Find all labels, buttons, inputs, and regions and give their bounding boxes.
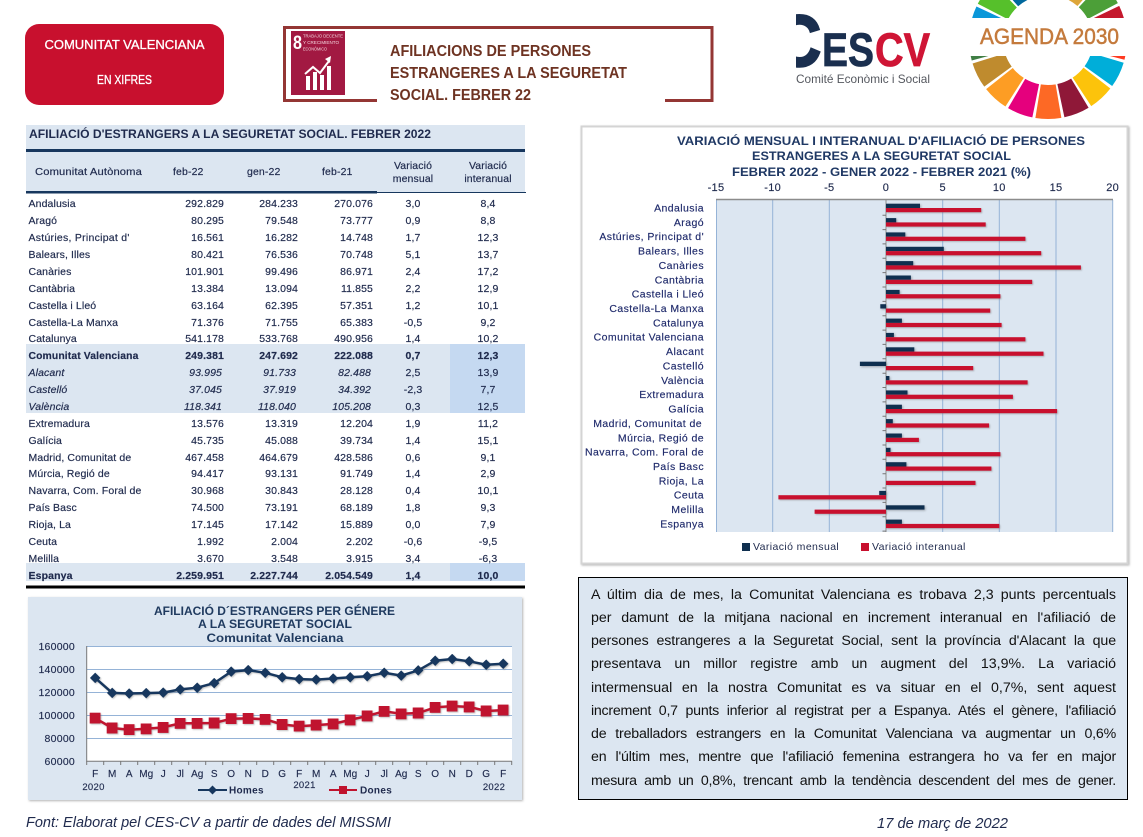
table column: variació mensual xyxy=(404,198,422,582)
table header: Variació xyxy=(394,160,432,172)
table column: feb-22: 467.458 xyxy=(185,452,224,464)
table column: variació mensual: 5,1 xyxy=(406,249,421,261)
bar chart legend xyxy=(742,541,966,553)
table column: gen-22: 99.496 xyxy=(265,266,298,278)
table column: gen-22: 3.548 xyxy=(271,553,298,565)
table column: regions: Castella-La Manxa xyxy=(28,317,118,329)
table column: feb-21: 270.076 xyxy=(334,198,373,210)
table column: variació interanual: 11,2 xyxy=(478,418,498,430)
table column: regions: Castella i Lleó xyxy=(28,300,96,312)
line chart x axis labels: A xyxy=(330,769,337,780)
logo: Agenda 2030 wheel: AGENDA 2030 xyxy=(980,24,1119,49)
table column: regions: Rioja, La xyxy=(28,519,71,531)
table column: feb-22: 3.670 xyxy=(197,553,224,565)
table column: gen-22: 93.131 xyxy=(265,468,298,480)
table column: regions: Navarra, Com. Foral de xyxy=(28,485,142,497)
table column: regions: Alacant xyxy=(28,367,65,379)
date: 17 de març de 2022 xyxy=(877,815,1009,832)
heading: AFILIACIONS DE PERSONES xyxy=(390,43,591,60)
text block: analysis paragraph: intermensual en la nostra Comunitat es va situar en el 0,7%, sent aquest xyxy=(591,680,1116,696)
table column: variació interanual: -9,5 xyxy=(479,536,497,548)
icon: SDG 8 decent work: TRABAJO DECENTE xyxy=(303,34,343,38)
logo: CES CV: Comité Econòmic i Social xyxy=(796,72,930,86)
table column: variació interanual: 10,1 xyxy=(478,485,498,497)
bar chart axis labels: 5 xyxy=(939,182,946,194)
bar chart category labels: Andalusia xyxy=(654,202,704,214)
line chart x axis labels: M xyxy=(108,769,116,780)
table column: regions: Ceuta xyxy=(28,536,57,548)
table column: feb-22: 80.421 xyxy=(191,249,224,261)
table column: variació mensual: 2,4 xyxy=(406,266,421,278)
table column: regions: Balears, Illes xyxy=(28,249,90,261)
table title: AFILIACIÓ D'ESTRANGERS A LA SEGURETAT SOCIAL. FEBRER 2022 xyxy=(29,128,431,141)
table column: feb-21: 68.189 xyxy=(340,502,373,514)
table column: feb-21: 14.748 xyxy=(340,232,373,244)
badge: Comunitat Valenciana en xifres: COMUNITAT VALENCIANA xyxy=(44,38,205,52)
bar chart legend: Variació mensual xyxy=(753,541,839,553)
line chart x axis labels: F xyxy=(296,769,302,780)
table column: gen-22: 37.919 xyxy=(263,384,296,396)
bar chart category labels: Balears, Illes xyxy=(638,246,704,258)
table column: regions: Andalusia xyxy=(28,198,76,210)
table column: feb-22: 13.576 xyxy=(191,418,224,430)
table column: variació mensual: -2,3 xyxy=(404,384,422,396)
bar chart category labels: Castella i Lleó xyxy=(632,289,704,301)
table column: regions: Melilla xyxy=(28,553,59,565)
line chart title: AFILIACIÓ D´ESTRANGERS PER GÉNERE xyxy=(154,605,395,618)
bar chart category labels: València xyxy=(661,375,704,387)
line chart x axis labels: D xyxy=(466,769,473,780)
table column: feb-21: 57.351 xyxy=(340,300,373,312)
table column: variació mensual: 0,9 xyxy=(406,215,421,227)
line chart x axis labels: Ag xyxy=(191,769,203,780)
table column: variació interanual: 12,3 xyxy=(478,350,498,362)
table column: gen-22: 284.233 xyxy=(259,198,298,210)
table column: feb-21: 11.855 xyxy=(341,283,373,295)
table column: variació interanual: 2,9 xyxy=(481,468,496,480)
table column: variació interanual xyxy=(478,198,498,582)
line chart x axis labels: 2021 xyxy=(293,780,316,791)
table column: feb-21: 2.202 xyxy=(346,536,373,548)
icon: SDG 8 decent work: ECONÓMICO xyxy=(303,46,327,52)
table column: variació interanual: 17,2 xyxy=(478,266,498,278)
table column: feb-22: 249.381 xyxy=(185,350,224,362)
line chart x axis labels: O xyxy=(227,769,235,780)
line chart y axis labels: 140000 xyxy=(38,664,75,676)
bar chart category labels: Comunitat Valenciana xyxy=(594,332,704,344)
table column: feb-21: 91.749 xyxy=(340,468,373,480)
table column: variació mensual: 1,9 xyxy=(406,418,421,430)
text block: analysis paragraph: presentava un millor registre amb un augment del 13,9%. La variació xyxy=(591,656,1116,672)
table column: gen-22: 62.395 xyxy=(265,300,298,312)
line chart title xyxy=(154,605,395,645)
table column: regions: Aragó xyxy=(28,215,57,227)
table column: variació mensual: 1,2 xyxy=(406,300,421,312)
table header: Comunitat Autònoma xyxy=(35,166,142,178)
table column: feb-22 xyxy=(176,198,224,582)
table column: regions: València xyxy=(28,401,69,413)
table column: variació interanual: 15,1 xyxy=(478,435,498,447)
table column: gen-22: 533.768 xyxy=(259,333,298,345)
line chart x axis labels: G xyxy=(482,769,490,780)
table column: variació mensual: 0,6 xyxy=(406,452,421,464)
line chart x axis labels: 2020 xyxy=(82,782,105,793)
table column: feb-21: 39.734 xyxy=(340,435,373,447)
table column: gen-22: 247.692 xyxy=(259,350,298,362)
table column: regions: Castelló xyxy=(28,384,67,396)
table column: feb-22: 13.384 xyxy=(191,283,224,295)
table column: feb-21: 65.383 xyxy=(340,317,373,329)
icon: SDG 8 decent work: Y CRECIMIENTO xyxy=(303,40,340,45)
text block: analysis paragraph: persones estrangeres a la Seguretat Social, sent la província d'Alacant la que xyxy=(591,633,1116,649)
bar chart category labels: Astúries, Principat d' xyxy=(599,231,704,243)
table column: variació interanual: 10,0 xyxy=(478,570,498,582)
table column: variació interanual: 13,9 xyxy=(478,367,498,379)
table column: regions: Catalunya xyxy=(28,333,77,345)
table column: feb-22: 17.145 xyxy=(191,519,224,531)
bar chart axis labels: -10 xyxy=(764,182,781,194)
logo: CES CV: CV xyxy=(875,23,931,76)
table column: feb-22: 101.901 xyxy=(185,266,224,278)
table column: regions: Canàries xyxy=(28,266,71,278)
table column: variació mensual: 3,4 xyxy=(406,553,421,565)
line chart x axis labels: O xyxy=(431,769,439,780)
table column: variació interanual: 12,3 xyxy=(478,232,498,244)
table column: variació interanual: 12,9 xyxy=(478,283,498,295)
table column: variació mensual: 1,4 xyxy=(406,468,421,480)
line chart legend: Dones xyxy=(360,786,392,796)
table column: variació mensual: 3,0 xyxy=(406,198,421,210)
bars: variació mensual xyxy=(860,204,944,524)
table column: feb-21: 2.054.549 xyxy=(325,570,373,582)
table column: variació interanual: 8,8 xyxy=(481,215,496,227)
bar chart category labels: Castella-La Manxa xyxy=(609,303,704,315)
table header: Variació xyxy=(469,160,507,172)
table column: feb-22: 94.417 xyxy=(191,468,224,480)
table header: gen-22 xyxy=(247,166,280,178)
title frame xyxy=(284,28,712,104)
bar chart axis labels: 10 xyxy=(993,182,1006,194)
table column: gen-22: 45.088 xyxy=(265,435,298,447)
table column: gen-22: 2.004 xyxy=(271,536,298,548)
table column: gen-22: 17.142 xyxy=(265,519,298,531)
text block: analysis paragraph: A últim dia de mes, la Comunitat Valenciana es trobava 2,3 punts percentuals xyxy=(591,586,1116,602)
table column: feb-22: 93.995 xyxy=(189,367,222,379)
table column: variació mensual: 1,7 xyxy=(406,232,421,244)
line chart x axis labels: 2022 xyxy=(483,782,505,793)
panel: bar chart variació mensual i interanual xyxy=(582,126,1128,564)
table backgrounds xyxy=(26,125,526,588)
source note: Font: Elaborat pel CES-CV a partir de dades del MISSMI xyxy=(26,814,391,831)
bar chart axis labels: -5 xyxy=(824,182,834,194)
table column: feb-22: 292.829 xyxy=(185,198,224,210)
table column: regions: País Basc xyxy=(28,502,77,514)
table column: gen-22: 13.094 xyxy=(265,283,298,295)
bar chart category labels: Rioja, La xyxy=(659,475,704,487)
table column: gen-22: 118.040 xyxy=(258,401,296,413)
logo: CES CV xyxy=(796,14,930,83)
table column: feb-21 xyxy=(325,198,373,582)
text block: analysis paragraph: mesura amb un 0,8%, trencant amb la tendència descendent del mes de gener. xyxy=(591,772,1116,788)
line chart x axis labels: Jl xyxy=(177,769,184,780)
table column: variació interanual: 10,1 xyxy=(478,300,498,312)
table column: feb-22: 118.341 xyxy=(184,401,222,413)
bar chart axis labels: 0 xyxy=(883,182,889,194)
line chart legend xyxy=(198,786,392,796)
table column: feb-22: 63.164 xyxy=(191,300,224,312)
table column: regions: Espanya xyxy=(28,570,73,582)
table column: feb-21: 428.586 xyxy=(334,452,373,464)
table column: variació mensual: -0,5 xyxy=(404,317,422,329)
bar chart category labels: Cantàbria xyxy=(655,274,704,286)
line chart x axis labels: N xyxy=(245,769,252,780)
line series: Dones xyxy=(95,706,503,730)
line chart x axis labels: N xyxy=(449,769,456,780)
line chart x axis labels: F xyxy=(500,769,506,780)
table column: feb-22: 80.295 xyxy=(191,215,224,227)
bar chart legend: Variació interanual xyxy=(872,541,966,553)
bar chart title: FEBRER 2022 - GENER 2022 - FEBRER 2021 (%) xyxy=(732,167,1031,179)
table column: variació interanual: 8,4 xyxy=(481,198,496,210)
table column: variació interanual: 9,1 xyxy=(481,452,496,464)
table column: gen-22: 464.679 xyxy=(259,452,298,464)
bar chart category labels: Extremadura xyxy=(639,389,704,401)
table column: gen-22: 79.548 xyxy=(265,215,298,227)
table header: interanual xyxy=(464,173,512,185)
bar chart category labels: Canàries xyxy=(659,260,704,272)
table column: variació mensual: 2,5 xyxy=(406,367,421,379)
line chart y axis labels: 60000 xyxy=(45,756,75,768)
line chart x axis labels: Mg xyxy=(139,769,153,780)
bar chart axis labels xyxy=(708,182,1119,194)
table column: feb-21: 34.392 xyxy=(338,384,371,396)
bar chart category labels: Espanya xyxy=(660,518,704,530)
table column: feb-22: 71.376 xyxy=(191,317,224,329)
line series: Homes xyxy=(95,659,503,694)
table column: feb-22: 1.992 xyxy=(197,536,224,548)
table column: variació mensual: 1,4 xyxy=(406,570,421,582)
table column: feb-22: 2.259.951 xyxy=(176,570,224,582)
table header: mensual xyxy=(393,173,433,185)
table column: gen-22 xyxy=(250,198,298,582)
text block: analysis paragraph: increment 0,7 punts inferior al registrat per a Espanya. Atés el gènere, l'afiliació xyxy=(591,702,1116,718)
bar chart category labels: País Basc xyxy=(653,461,704,473)
line chart y axis labels: 80000 xyxy=(45,733,75,745)
text block: analysis paragraph xyxy=(578,577,1128,800)
table column: variació interanual: 10,2 xyxy=(478,333,498,345)
table column: feb-21: 105.208 xyxy=(332,401,371,413)
line chart y axis labels xyxy=(38,641,75,768)
table column: variació mensual: 0,0 xyxy=(406,519,421,531)
table column: feb-22: 37.045 xyxy=(189,384,222,396)
table column: feb-22: 541.178 xyxy=(185,333,224,345)
table column: gen-22: 71.755 xyxy=(265,317,298,329)
table column: variació interanual: 9,3 xyxy=(481,502,496,514)
bar chart category labels: Melilla xyxy=(671,504,704,516)
line chart x axis labels: S xyxy=(415,769,422,780)
table column: regions: Madrid, Comunitat de xyxy=(28,452,131,464)
table column: variació mensual: 0,3 xyxy=(406,401,421,413)
table column: regions: Múrcia, Regió de xyxy=(28,468,110,480)
text block: analysis paragraph: de treballadors estrangers en la Comunitat Valenciana va augmentar un 0,6% xyxy=(591,726,1116,742)
table column: feb-22: 30.968 xyxy=(191,485,224,497)
bar chart category labels: Múrcia, Regió de xyxy=(618,432,704,444)
table column: gen-22: 13.319 xyxy=(265,418,298,430)
bar chart category labels: Castelló xyxy=(663,360,704,372)
icon: SDG 8 decent work: 8 xyxy=(293,33,302,54)
table column: gen-22: 16.282 xyxy=(265,232,298,244)
bar chart category labels: Catalunya xyxy=(653,317,704,329)
line chart x axis labels: Ag xyxy=(395,769,407,780)
line chart x axis labels: G xyxy=(278,769,286,780)
table column: feb-22: 74.500 xyxy=(191,502,224,514)
icon: SDG 8 decent work xyxy=(291,31,345,95)
line chart x axis labels: J xyxy=(161,769,166,780)
logo: CES CV: C xyxy=(775,2,821,82)
bar chart category labels: Aragó xyxy=(674,217,704,229)
text block: analysis paragraph: per damunt de la mitjana nacional en increment interanual en l'afiliació de xyxy=(591,610,1116,626)
line chart x axis labels: Jl xyxy=(381,769,388,780)
bar chart category labels: Galícia xyxy=(668,404,704,416)
table column: feb-21: 82.488 xyxy=(338,367,371,379)
line chart x axis labels: S xyxy=(211,769,218,780)
table column: feb-22: 16.561 xyxy=(191,232,224,244)
table column: feb-21: 73.777 xyxy=(340,215,373,227)
panel: line chart afiliació per gènere xyxy=(28,597,522,800)
heading: ESTRANGERES A LA SEGURETAT xyxy=(390,65,627,82)
line chart title: Comunitat Valenciana xyxy=(206,633,344,645)
bar chart axis labels: -15 xyxy=(708,182,724,194)
table column: variació interanual: 7,9 xyxy=(481,519,496,531)
line chart legend: Homes xyxy=(229,786,264,796)
table column: variació mensual: 1,4 xyxy=(406,333,421,345)
line chart plot area xyxy=(87,646,512,765)
table column: regions: Cantàbria xyxy=(28,283,75,295)
bar chart title: ESTRANGERES A LA SEGURETAT SOCIAL xyxy=(752,151,1011,163)
table header: feb-22 xyxy=(173,166,204,178)
line chart x axis labels: F xyxy=(92,769,98,780)
line chart y axis labels: 160000 xyxy=(38,641,75,653)
bar chart title xyxy=(677,135,1085,179)
table column: variació mensual: 0,4 xyxy=(406,485,421,497)
table column: variació mensual: 2,2 xyxy=(406,283,421,295)
table column: variació interanual: 13,7 xyxy=(478,249,498,261)
table column: feb-21: 12.204 xyxy=(340,418,373,430)
line chart title: A LA SEGURETAT SOCIAL xyxy=(198,619,352,631)
table column: regions xyxy=(28,198,142,582)
table column: feb-22: 45.735 xyxy=(191,435,224,447)
table column: variació mensual: 1,4 xyxy=(406,435,421,447)
table column: regions: Galícia xyxy=(28,435,62,447)
line chart x axis labels: Mg xyxy=(343,769,357,780)
table column: gen-22: 91.733 xyxy=(263,367,296,379)
table column: feb-21: 15.889 xyxy=(340,519,373,531)
table column: feb-21: 3.915 xyxy=(346,553,373,565)
bar chart plot area xyxy=(716,200,1113,532)
heading xyxy=(390,43,627,104)
bar chart axis labels: 20 xyxy=(1106,182,1119,194)
table: afiliació d'estrangers xyxy=(26,125,526,588)
table column: gen-22: 2.227.744 xyxy=(250,570,298,582)
line chart x axis labels: M xyxy=(312,769,320,780)
table column: feb-21: 86.971 xyxy=(340,266,373,278)
table column: gen-22: 73.191 xyxy=(265,502,298,514)
table column: feb-21: 70.748 xyxy=(340,249,373,261)
bar chart category labels: Ceuta xyxy=(674,490,704,502)
bar chart category labels: Navarra, Com. Foral de xyxy=(585,447,704,459)
text block: analysis paragraph: en l'últim mes, mentre que l'afiliació femenina estrangera ho va fer en major xyxy=(591,749,1116,765)
bar chart axis labels: 15 xyxy=(1050,182,1062,194)
line chart y axis labels: 120000 xyxy=(38,687,75,699)
bars: variació interanual xyxy=(778,208,1081,528)
line chart x axis labels: A xyxy=(126,769,133,780)
line chart x axis labels: D xyxy=(262,769,269,780)
line chart x axis labels: J xyxy=(365,769,370,780)
badge: Comunitat Valenciana en xifres xyxy=(25,24,224,105)
bar chart category labels xyxy=(585,202,704,530)
heading: SOCIAL. FEBRER 22 xyxy=(390,87,531,104)
table column: variació mensual: 0,7 xyxy=(406,350,421,362)
logo: CES CV: ES xyxy=(822,23,874,76)
table header: feb-21 xyxy=(322,166,353,178)
table column: variació interanual: 7,7 xyxy=(481,384,496,396)
table column: variació interanual: 9,2 xyxy=(481,317,496,329)
table column: regions: Astúries, Principat d' xyxy=(28,232,130,244)
table column: regions: Comunitat Valenciana xyxy=(28,350,139,362)
table column: variació interanual: -6,3 xyxy=(479,553,497,565)
table column: feb-21: 490.956 xyxy=(334,333,373,345)
badge: Comunitat Valenciana en xifres: EN XIFRES xyxy=(97,73,152,87)
line chart y axis labels: 100000 xyxy=(38,710,75,722)
table column: feb-21: 222.088 xyxy=(334,350,373,362)
bar chart title: VARIACIÓ MENSUAL I INTERANUAL D'AFILIACIÓ DE PERSONES xyxy=(677,135,1085,148)
table header xyxy=(35,160,512,185)
table column: variació mensual: -0,6 xyxy=(404,536,422,548)
logo: Agenda 2030 wheel xyxy=(960,0,1143,128)
bar chart category labels: Alacant xyxy=(666,346,704,358)
line chart x axis labels xyxy=(82,769,506,793)
table column: variació mensual: 1,8 xyxy=(406,502,421,514)
table column: gen-22: 30.843 xyxy=(265,485,298,497)
table column: feb-21: 28.128 xyxy=(340,485,373,497)
table column: regions: Extremadura xyxy=(28,418,90,430)
table column: gen-22: 76.536 xyxy=(265,249,298,261)
bar chart category labels: Madrid, Comunitat de xyxy=(593,418,702,430)
table column: variació interanual: 12,5 xyxy=(478,401,498,413)
